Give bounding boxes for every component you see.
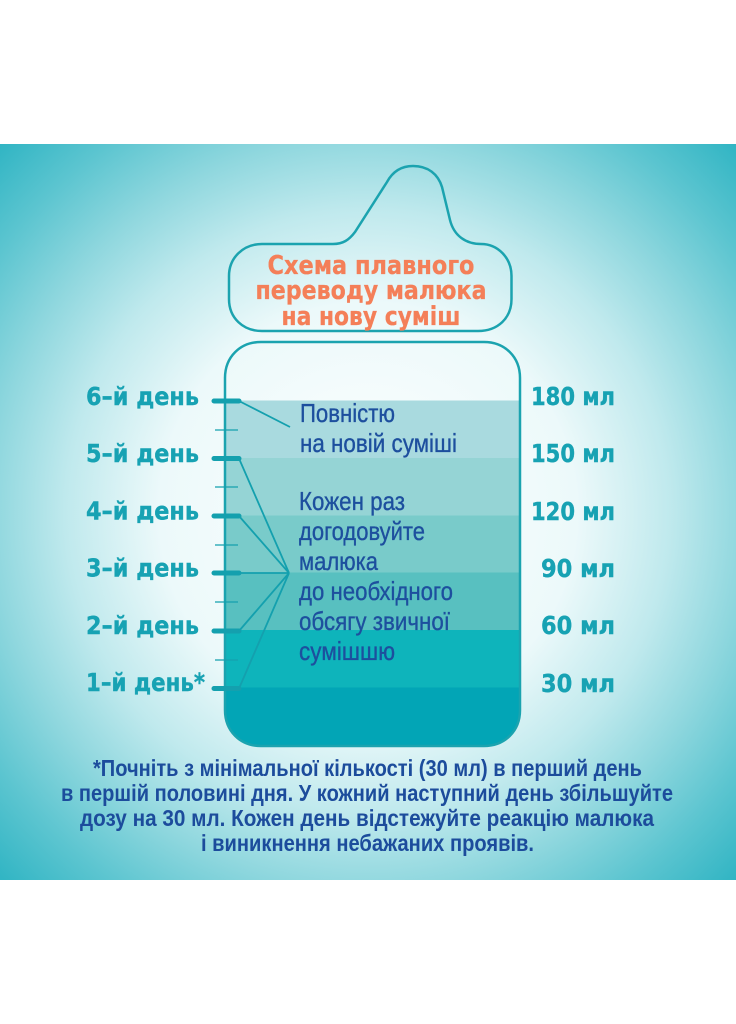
instruction: top up with usual formula: до необхідного xyxy=(299,576,453,606)
instruction: top up with usual formula: малюка xyxy=(299,546,378,576)
bottle nipple with title xyxy=(229,166,512,332)
footnote: і виникнення небажаних проявів. xyxy=(201,830,534,856)
bottle body with volume bands xyxy=(225,342,520,746)
footnote xyxy=(61,755,673,856)
instruction: fully on new formula: Повністю xyxy=(300,398,395,428)
instruction: fully on new formula: на новій суміші xyxy=(300,428,457,458)
title xyxy=(256,251,486,332)
volume labels: 30 мл xyxy=(541,669,615,698)
footnote: дозу на 30 мл. Кожен день відстежуйте реакцію малюка xyxy=(80,805,654,831)
volume labels: 180 мл xyxy=(531,382,615,411)
background panel xyxy=(0,144,736,880)
instruction: top up with usual formula xyxy=(299,486,453,666)
volume labels: 60 мл xyxy=(541,611,615,640)
volume labels: 90 мл xyxy=(541,554,615,583)
footnote: *Почніть з мінімальної кількості (30 мл) в перший день xyxy=(93,755,642,781)
volume labels xyxy=(531,382,615,698)
day labels: 2–й день xyxy=(86,611,199,640)
instruction: top up with usual formula: Кожен раз xyxy=(299,486,405,516)
day labels: 5–й день xyxy=(86,439,199,468)
instruction: top up with usual formula: сумішшю xyxy=(299,636,395,666)
volume labels: 150 мл xyxy=(531,439,615,468)
day labels xyxy=(86,382,205,697)
title: Схема плавного xyxy=(268,251,474,281)
instruction: top up with usual formula: догодовуйте xyxy=(299,516,425,546)
volume labels: 120 мл xyxy=(531,497,615,526)
day labels: 6–й день xyxy=(86,382,199,411)
connector lines xyxy=(239,401,290,688)
title: переводу малюка xyxy=(256,276,486,306)
title: на нову суміш xyxy=(282,302,460,332)
day labels: 1–й день* xyxy=(86,668,205,697)
day labels: 3–й день xyxy=(86,554,199,582)
instruction: fully on new formula xyxy=(300,398,457,458)
scale ticks xyxy=(214,401,239,688)
day labels: 4–й день xyxy=(86,496,199,526)
instruction: top up with usual formula: обсягу звичної xyxy=(299,606,450,636)
